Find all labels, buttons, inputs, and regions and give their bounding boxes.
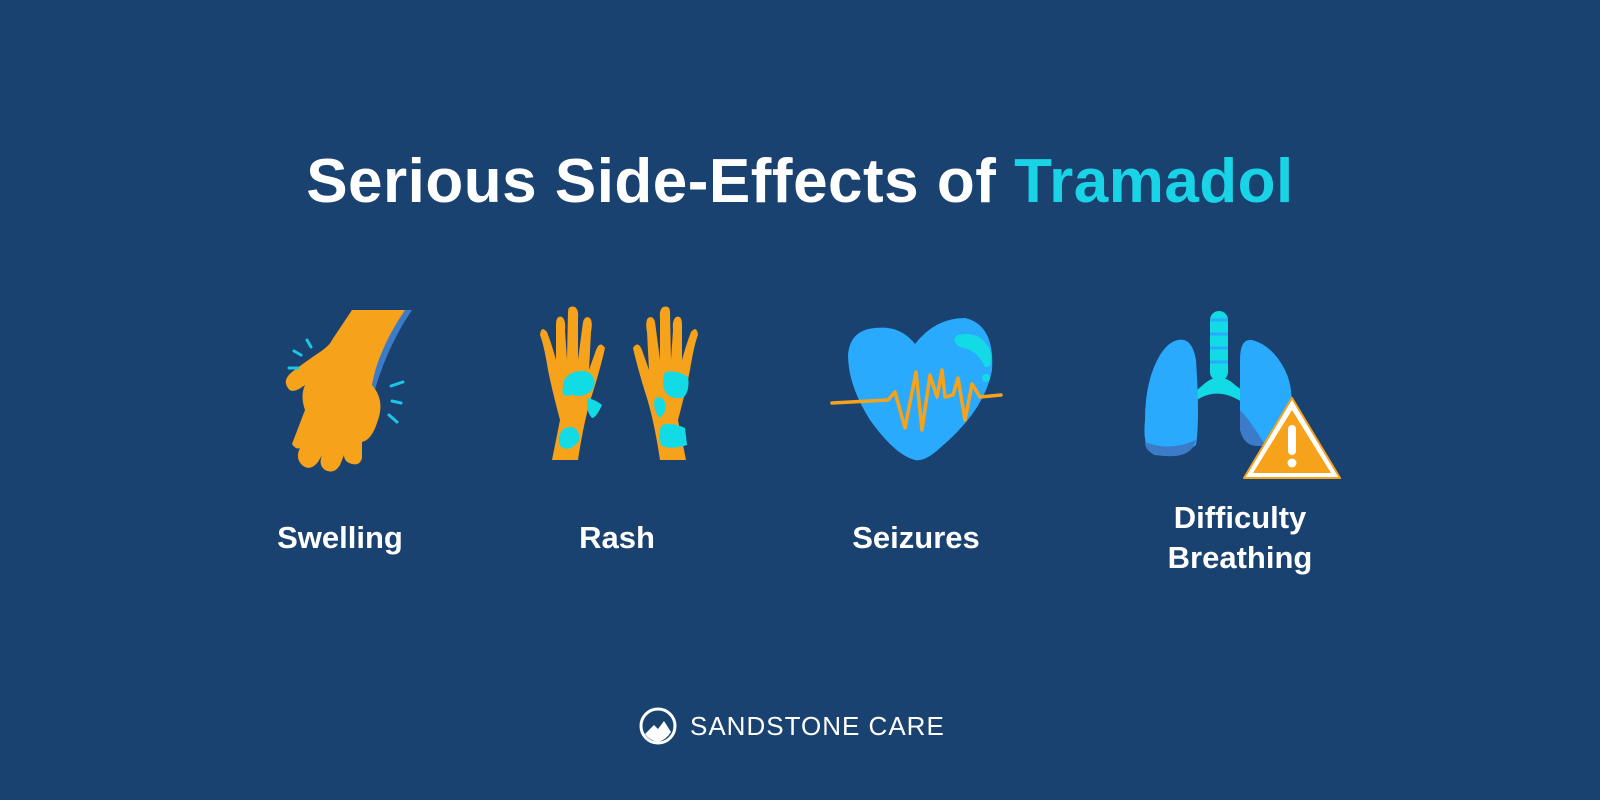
label: difficulty breathing: Difficulty — [1174, 500, 1306, 535]
label: rash: Rash — [579, 520, 655, 555]
label: difficulty breathing — [1168, 500, 1312, 575]
logo: sandstone care — [640, 708, 945, 744]
logo: sandstone care: SANDSTONE CARE — [690, 711, 945, 741]
icon: hands with rash — [540, 307, 698, 460]
icon: swollen hand — [286, 310, 412, 472]
title: Serious Side-Effects of Tramadol — [306, 147, 1294, 216]
label: difficulty breathing: Breathing — [1168, 540, 1312, 575]
icon: heart with heartbeat — [832, 318, 1001, 460]
label: seizures: Seizures — [852, 520, 980, 555]
label: swelling: Swelling — [277, 520, 403, 555]
icon: lungs with warning — [1144, 311, 1340, 478]
